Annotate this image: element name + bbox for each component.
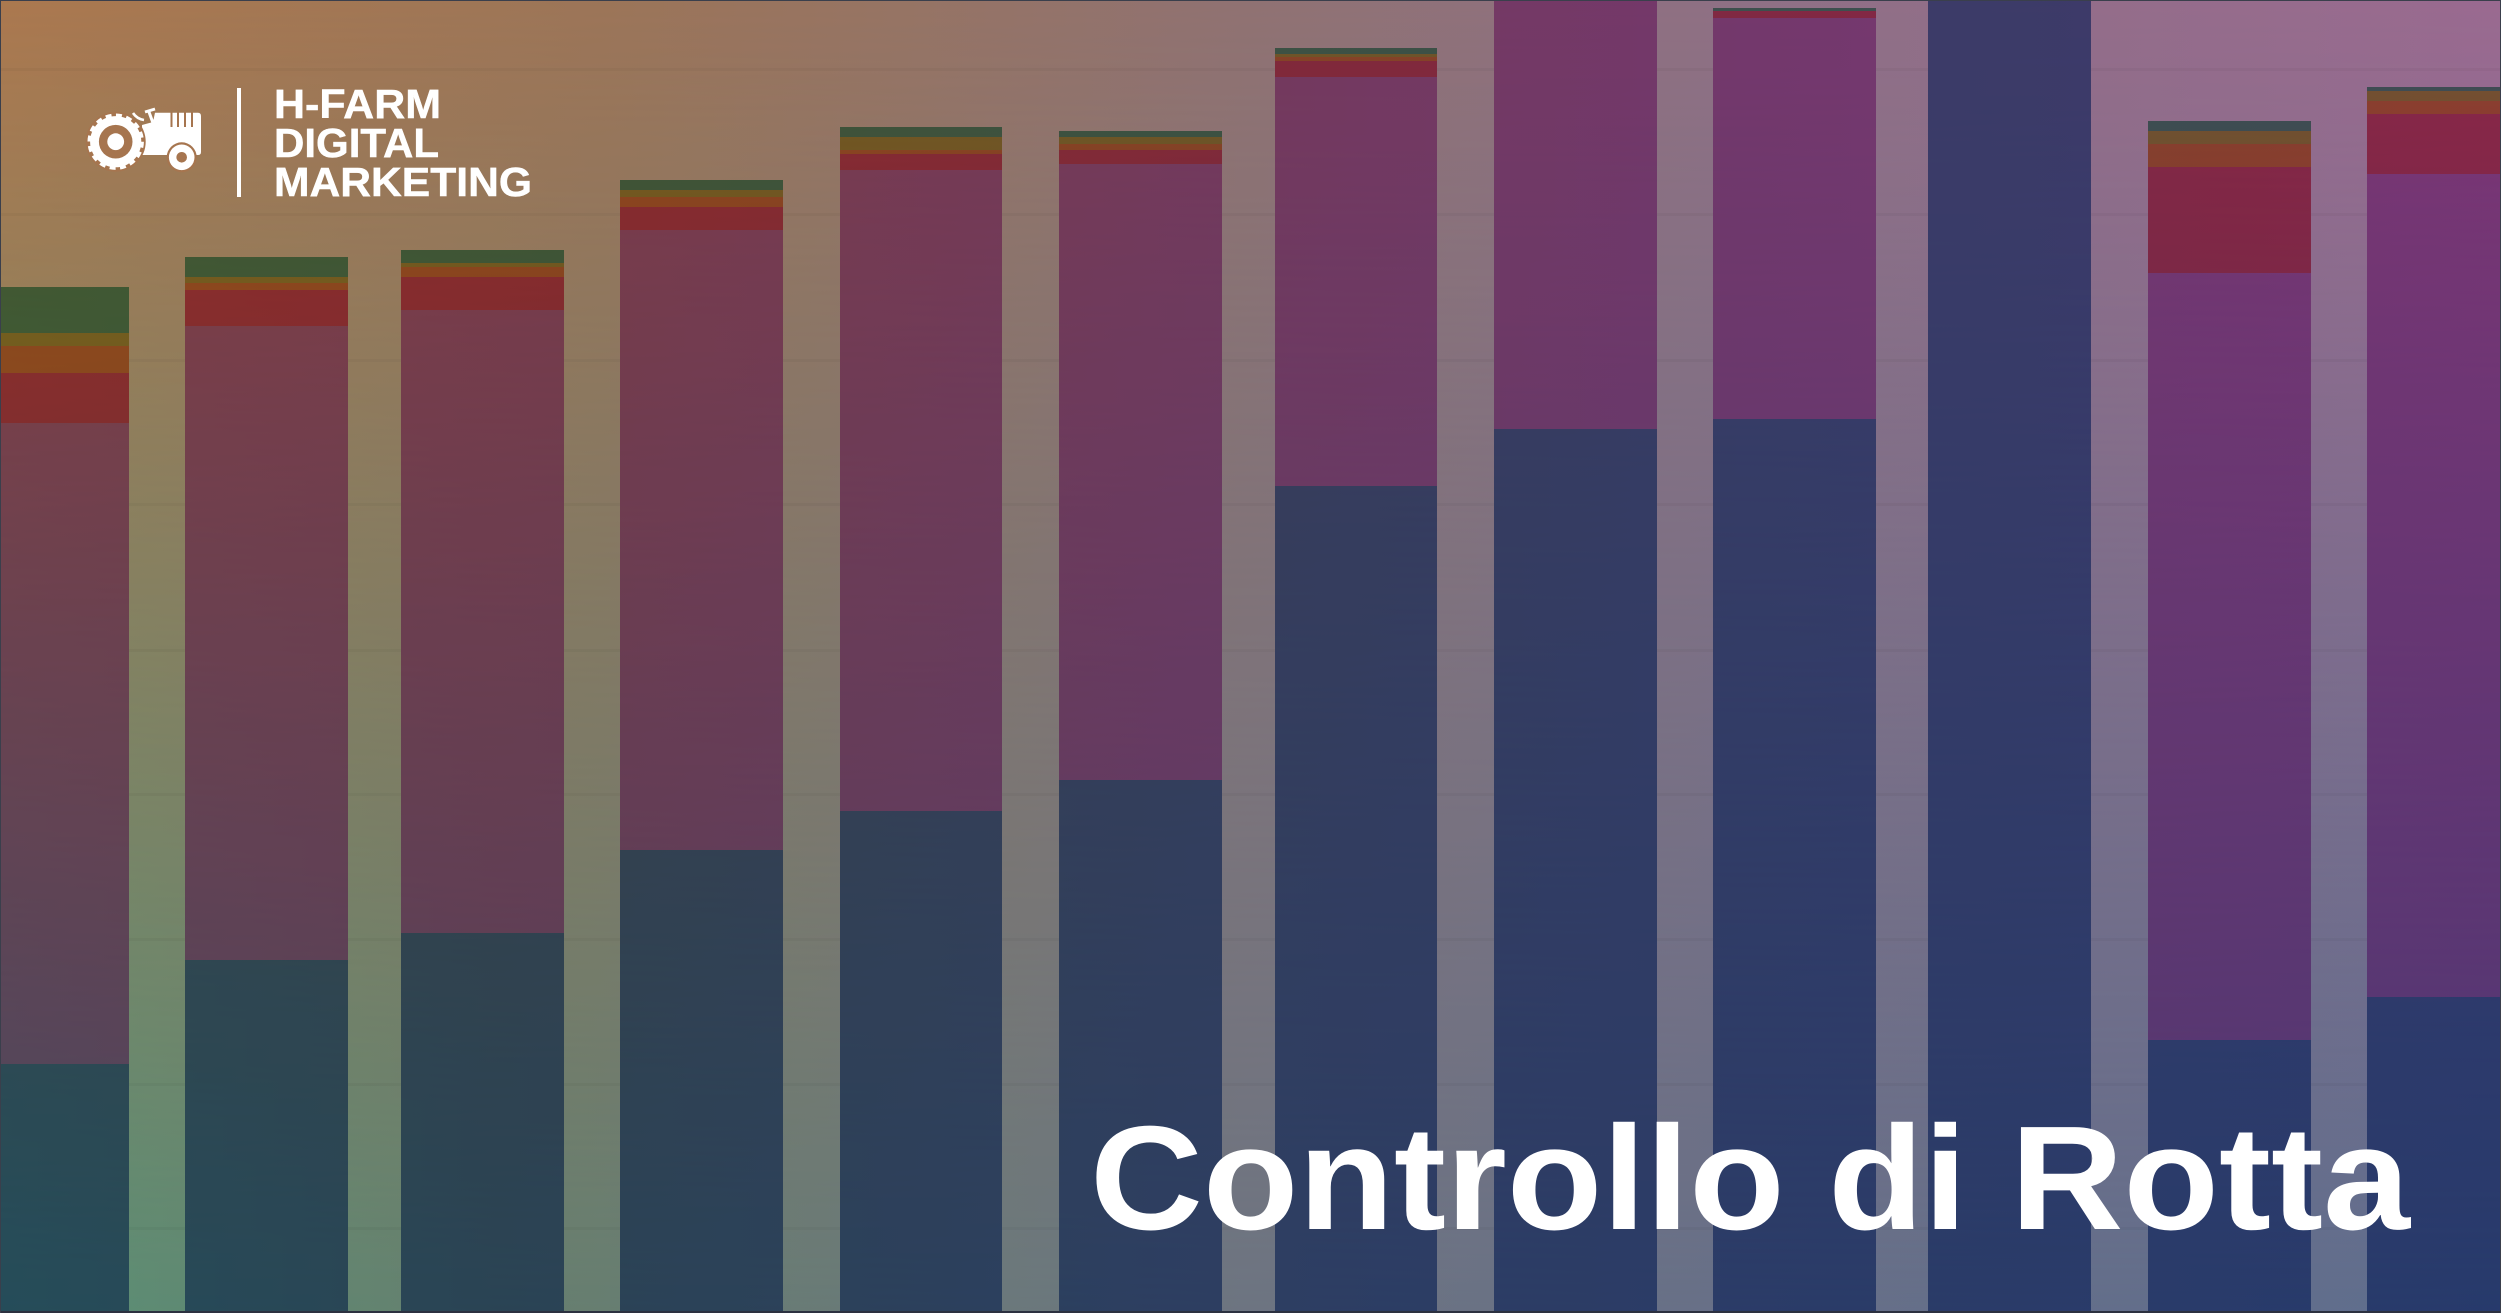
bar 1 [0, 287, 129, 1313]
logo wordmark: DIGITAL [274, 120, 439, 166]
logo wordmark: MARKETING [274, 159, 532, 205]
icon: tractor [86, 109, 201, 172]
title: Controllo di Rotta [1090, 1096, 2412, 1261]
logo wordmark [274, 81, 532, 205]
bar 6 [1059, 131, 1222, 1313]
bar 2 [185, 257, 348, 1313]
divider [237, 88, 241, 197]
bar 7 [1275, 48, 1437, 1313]
bar 10 [1928, 0, 2091, 1313]
logo [86, 81, 532, 205]
bar 8 [1494, 0, 1657, 1313]
bar 11 [2148, 121, 2311, 1313]
bar 4 [620, 180, 783, 1313]
bar 3 [401, 250, 564, 1313]
bar 12 [2367, 87, 2501, 1313]
logo wordmark: H-FARM [274, 81, 441, 127]
bar 5 [840, 127, 1002, 1313]
bar 9 [1713, 8, 1876, 1313]
